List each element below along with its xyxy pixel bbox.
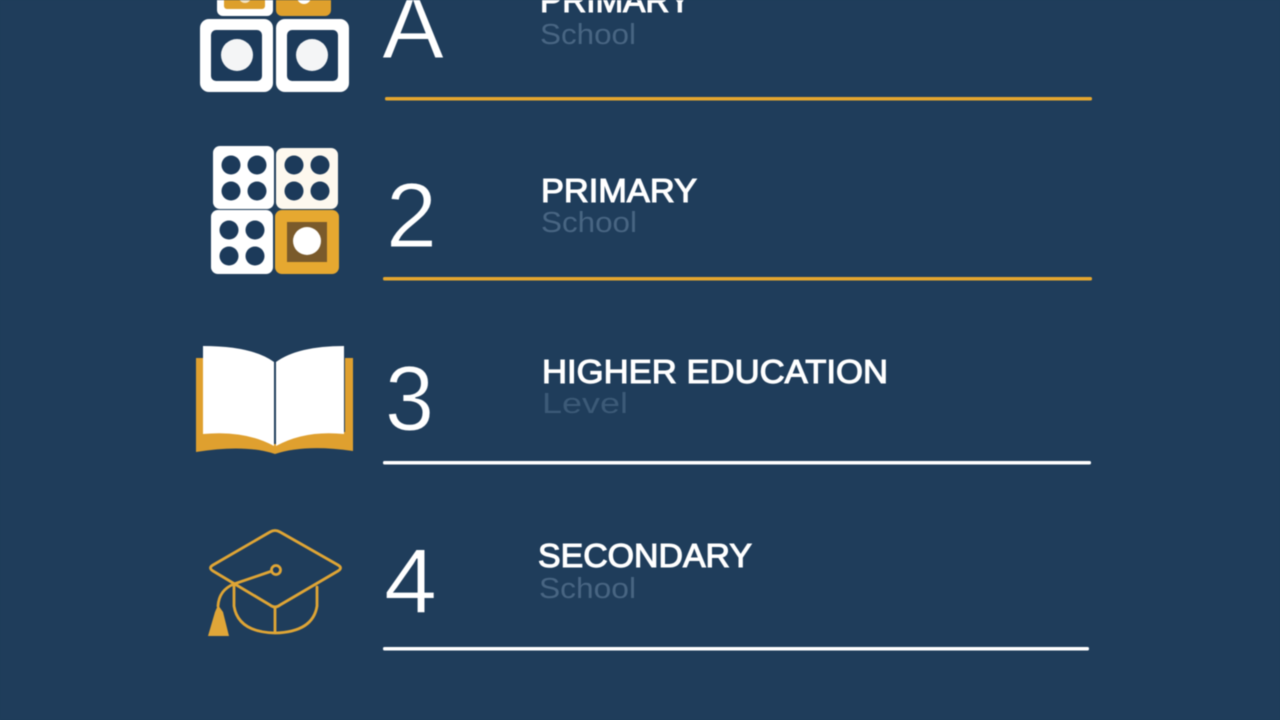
row 4: secondary school, number 4 — [208, 530, 1089, 650]
heading: secondary: SECONDARY — [538, 537, 752, 574]
divider: orange — [383, 277, 1092, 280]
heading: higher education: HIGHER EDUCATION — [542, 353, 888, 390]
number: 3: 3 — [385, 348, 434, 450]
divider: white — [383, 647, 1089, 650]
divider: white — [383, 461, 1091, 464]
icon: dice tiles — [211, 146, 339, 274]
divider: orange — [385, 97, 1092, 100]
icon: open book — [196, 346, 353, 454]
subheading: school: School — [540, 19, 636, 51]
row 2: primary school, number 2 — [211, 146, 1092, 280]
icon: graduation cap — [208, 530, 340, 636]
row 3: higher education, number 3 — [196, 346, 1091, 464]
icon: blocks with dots — [200, 0, 349, 92]
subheading: school: School — [539, 573, 636, 605]
row 1: primary school, letter A — [200, 0, 1092, 100]
number: 4: 4 — [384, 531, 437, 633]
number: 2: 2 — [386, 165, 437, 267]
heading: primary: PRIMARY — [541, 172, 697, 209]
subheading: level: Level — [542, 388, 628, 420]
subheading: school: School — [541, 207, 637, 239]
